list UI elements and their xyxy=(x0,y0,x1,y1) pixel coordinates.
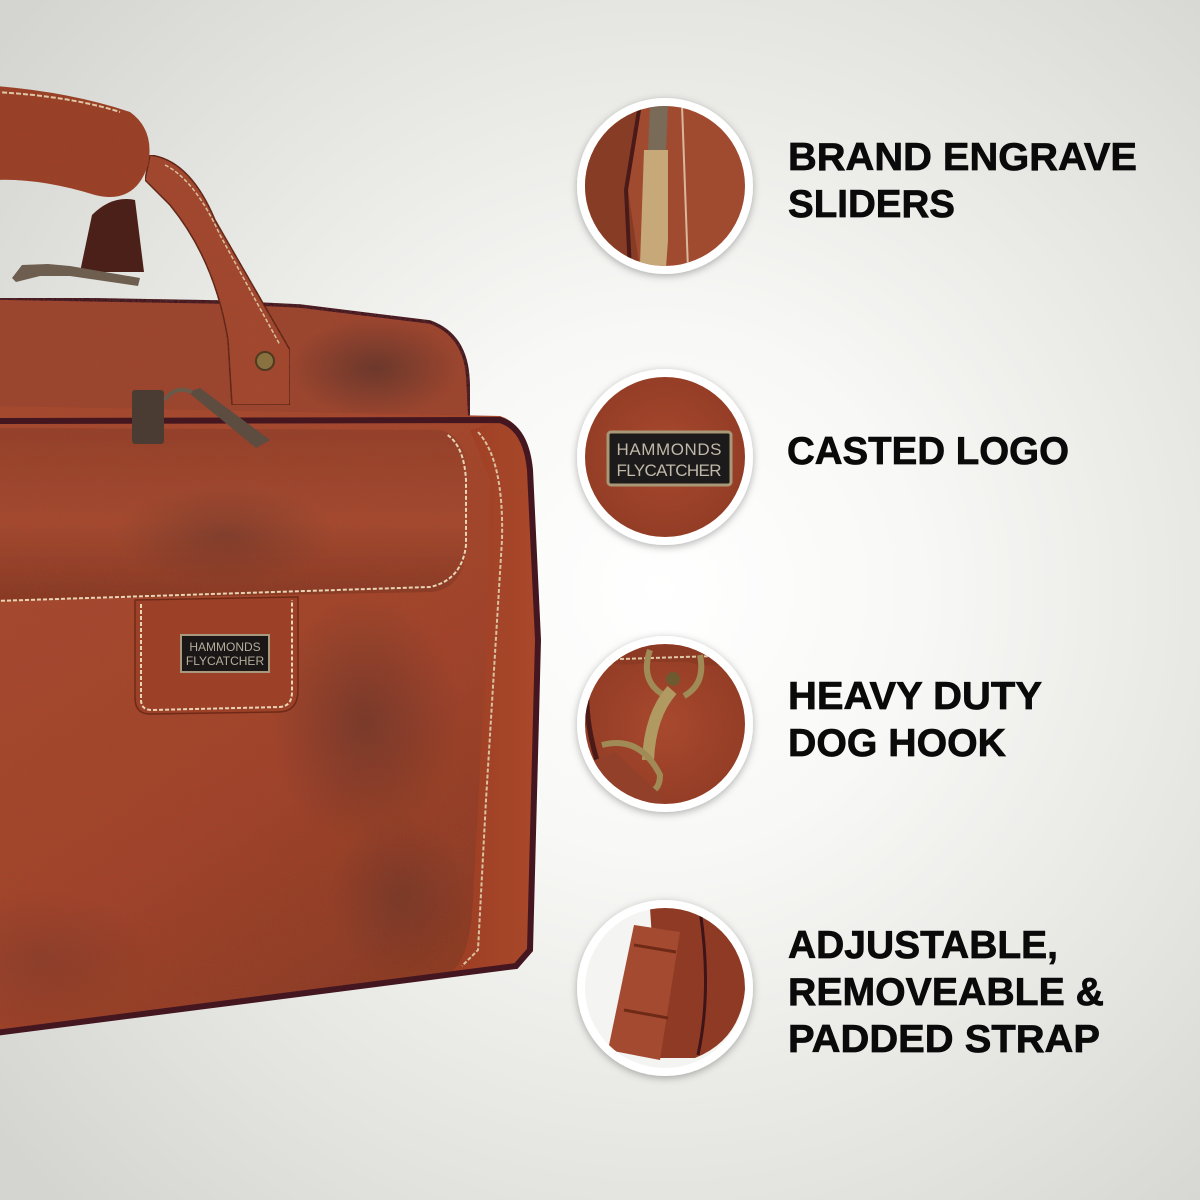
label: REMOVEABLE & xyxy=(788,971,1104,1014)
detail image: padded strap xyxy=(580,900,750,1076)
front panel xyxy=(0,406,538,1035)
handle straps xyxy=(145,155,290,405)
detail image: logo plate: FLYCATCHER xyxy=(616,461,722,480)
detail image: dog hook xyxy=(580,640,750,820)
label: CASTED LOGO xyxy=(787,430,1069,473)
logo plate: FLYCATCHER xyxy=(186,654,264,668)
label: DOG HOOK xyxy=(788,722,1006,765)
label xyxy=(788,924,1104,1061)
label: SLIDERS xyxy=(788,183,955,226)
product image: leather laptop bag xyxy=(0,86,538,1035)
detail image: logo plate: HAMMONDS xyxy=(616,440,722,459)
logo patch xyxy=(135,597,298,714)
pocket xyxy=(0,428,468,600)
side seam stitching xyxy=(462,432,502,966)
handle grip xyxy=(0,86,150,197)
label xyxy=(788,136,1137,226)
rear strap loop xyxy=(80,199,144,272)
feature 4: adjustable padded strap xyxy=(580,900,1104,1076)
side gusset xyxy=(450,420,537,972)
top zip sliders xyxy=(12,264,140,286)
logo plate xyxy=(181,635,269,672)
detail image: zipper slider xyxy=(580,100,750,270)
rivet xyxy=(256,352,274,370)
feature 1: brand engrave sliders xyxy=(580,100,1137,270)
label: HEAVY DUTY xyxy=(788,675,1042,718)
feature 3: heavy duty dog hook xyxy=(580,640,1042,820)
piping xyxy=(0,420,538,1033)
label: ADJUSTABLE, xyxy=(788,924,1058,967)
label xyxy=(788,675,1042,765)
feature 2: casted logo xyxy=(580,370,1069,541)
front zip pullers xyxy=(132,388,270,448)
logo plate: HAMMONDS xyxy=(189,640,261,654)
pocket stitching xyxy=(0,434,466,601)
detail image: logo plate xyxy=(580,370,750,541)
label: BRAND ENGRAVE xyxy=(788,136,1137,179)
rear compartment xyxy=(0,298,470,420)
label: PADDED STRAP xyxy=(788,1018,1100,1061)
lower shading xyxy=(270,595,460,845)
